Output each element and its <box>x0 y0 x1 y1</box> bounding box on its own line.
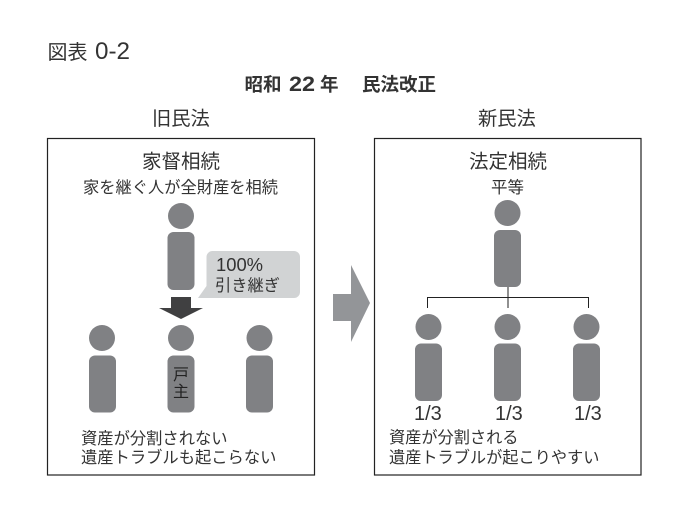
speech bubble: 100% <box>216 254 263 275</box>
panel subheading: 家を継ぐ人が全財産を相続 <box>83 179 278 197</box>
figure number: 図表 <box>48 41 88 64</box>
panel heading: 法定相続 <box>469 151 547 173</box>
figure number: 0-2 <box>95 38 130 65</box>
share labels: 1/3 <box>414 403 442 425</box>
speech bubble: 引き継ぎ <box>215 277 280 295</box>
title <box>244 73 436 96</box>
person: househead: 主 <box>173 383 189 401</box>
panel: new civil code <box>374 138 641 475</box>
person: sibling right <box>246 325 273 412</box>
panel: old civil code <box>48 138 314 475</box>
person: househead <box>168 325 194 412</box>
title: 年 <box>320 74 339 95</box>
panel conclusion: 資産が分割されない <box>81 430 228 448</box>
person: heir left <box>415 314 442 401</box>
panel subheading: 平等 <box>491 178 524 197</box>
arrow: old to new <box>333 265 370 342</box>
title: 昭和 <box>244 74 282 95</box>
person: heir centre <box>494 314 521 401</box>
title: 民法改正 <box>362 74 436 95</box>
person: heir right <box>573 314 600 401</box>
person: decedent <box>494 200 521 287</box>
panel conclusion: 資産が分割される <box>389 429 518 447</box>
title: 22 <box>289 73 315 96</box>
panel conclusion: 遺産トラブルが起こりやすい <box>389 448 599 467</box>
panel conclusion: 遺産トラブルも起こらない <box>81 448 276 467</box>
speech bubble <box>198 251 300 298</box>
share labels <box>414 403 602 425</box>
share labels: 1/3 <box>574 403 602 425</box>
share labels: 1/3 <box>495 403 523 425</box>
person: head of family <box>168 203 194 290</box>
person: househead: 戸 <box>173 367 189 384</box>
heading: new civil code: 新民法 <box>478 108 536 130</box>
arrow: inheritance <box>159 297 203 319</box>
heading: old civil code: 旧民法 <box>152 108 210 130</box>
person: sibling left <box>89 325 116 412</box>
panel conclusion <box>389 429 599 467</box>
panel conclusion <box>81 430 276 467</box>
panel heading: 家督相続 <box>142 151 220 173</box>
connector lines <box>428 287 588 308</box>
figure number <box>48 38 130 65</box>
